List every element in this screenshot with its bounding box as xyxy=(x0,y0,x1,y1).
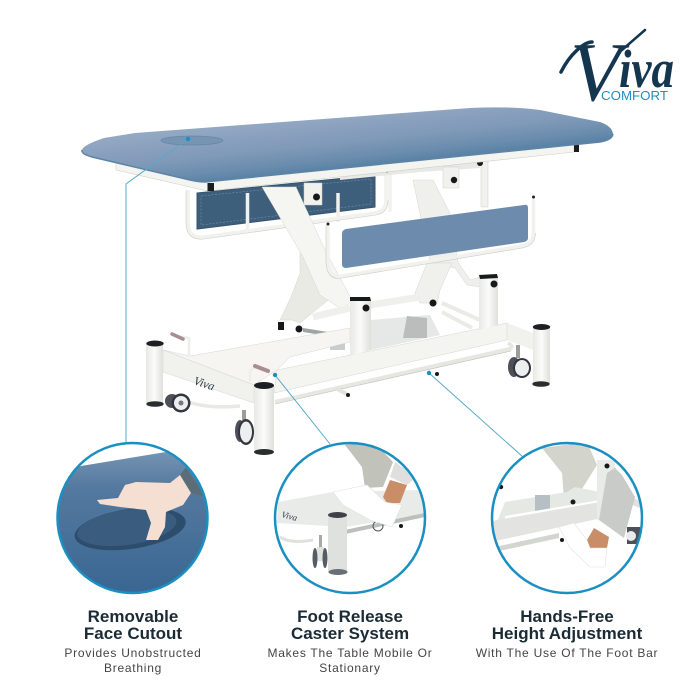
detail circle: foot release: Viva xyxy=(280,509,299,523)
base top plate and beams xyxy=(163,323,507,403)
callout line: face cutout xyxy=(126,137,190,443)
table top cushion xyxy=(82,107,613,182)
caster: rear right xyxy=(508,345,531,378)
rear scissor legs xyxy=(413,180,480,303)
mid posts xyxy=(278,274,498,356)
detail circle: foot bar xyxy=(490,442,645,593)
hand xyxy=(97,475,191,540)
caption: foot release: Makes The Table Mobile Or xyxy=(267,646,433,660)
removable pad xyxy=(74,508,186,550)
caption: face cutout: Breathing xyxy=(104,661,162,675)
caster xyxy=(319,535,322,548)
table mount blocks xyxy=(304,157,488,207)
frame strip under top xyxy=(116,145,574,191)
detail circle: foot release xyxy=(275,440,430,593)
callout line: foot bar xyxy=(427,371,523,457)
sleeve xyxy=(180,467,203,496)
back storage panel xyxy=(197,175,375,229)
caption: face cutout: Removable xyxy=(88,607,178,626)
shoe xyxy=(333,485,402,527)
logo: Viva Comfort xyxy=(561,26,674,119)
shoe xyxy=(559,523,607,567)
base end right xyxy=(507,323,533,350)
caster: front xyxy=(235,410,254,445)
base interior xyxy=(303,297,480,350)
trouser leg xyxy=(599,468,635,538)
frame brand mark: Viva xyxy=(192,374,216,393)
caption: hands-free xyxy=(476,607,658,660)
left scissor legs xyxy=(262,187,352,323)
table illustration xyxy=(82,107,613,455)
caption: hands-free: Hands-Free xyxy=(520,607,614,626)
caption: foot release: Caster System xyxy=(291,624,409,643)
callout line: foot release xyxy=(273,373,330,444)
foot bar xyxy=(275,343,512,404)
caption: face cutout: Provides Unobstructed xyxy=(64,646,202,660)
ankle xyxy=(383,480,407,503)
caption: hands-free: With The Use Of The Foot Bar xyxy=(476,646,658,660)
ankle xyxy=(587,528,609,548)
caption: foot release xyxy=(267,607,433,675)
logo: Viva Comfort: iva xyxy=(619,39,674,99)
caption: face cutout: Face Cutout xyxy=(84,624,182,643)
caster: rear left xyxy=(165,394,240,412)
handles xyxy=(172,334,268,382)
back rail xyxy=(188,163,390,237)
face cutout xyxy=(161,136,223,145)
detail circle: face cutout xyxy=(55,440,211,596)
caption: foot release: Stationary xyxy=(319,661,381,675)
logo: Viva Comfort: V xyxy=(570,26,630,119)
upper crossbar and brackets xyxy=(340,160,480,180)
front side pad and rail xyxy=(326,196,536,278)
caption: foot release: Foot Release xyxy=(297,607,403,626)
corner posts xyxy=(146,324,550,455)
logo: Viva Comfort: COMFORT xyxy=(601,89,668,103)
caption: hands-free: Height Adjustment xyxy=(492,624,643,643)
caption: face cutout xyxy=(64,607,202,675)
